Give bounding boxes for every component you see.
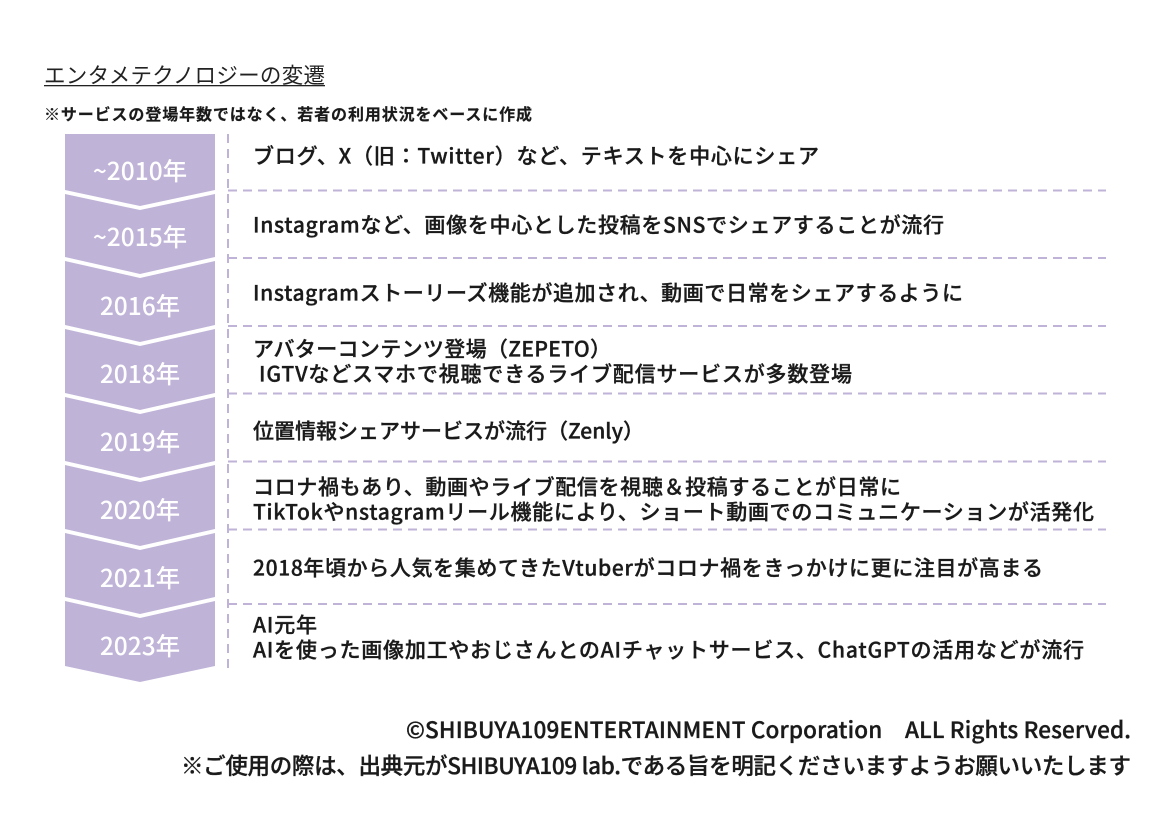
- timeline dividers: [228, 134, 1106, 672]
- year: 2021: [65, 533, 215, 614]
- row text: 2023: AIを使った画像加工やおじさんとのAIチャットサービス、ChatGPTの活用などが流行: [253, 635, 1084, 665]
- year: ~2015: [65, 194, 215, 274]
- year: 2016: [65, 261, 215, 342]
- row text: 2023: AI元年: [253, 610, 317, 640]
- row text: 2016: Instagramストーリーズ機能が追加され、動画で日常をシェアするように: [253, 278, 963, 308]
- row text: 2018: [253, 334, 852, 389]
- year: 2019: [65, 397, 215, 478]
- row text: 2019: 位置情報シェアサービスが流行（Zenly）: [253, 416, 644, 446]
- year: 2020: 2020年: [100, 492, 180, 527]
- year: 2023: 2023年: [100, 628, 180, 663]
- row text: 2021: 2018年頃から人気を集めてきたVtuberがコロナ禍をきっかけに更に注目が高まる: [253, 553, 1043, 583]
- year: 2018: 2018年: [100, 356, 180, 391]
- year: 2020: [65, 465, 215, 546]
- row text: 2020: TikTokやnstagramリール機能により、ショート動画でのコミュニケーションが活発化: [253, 497, 1094, 527]
- title: エンタメテクノロジーの変遷: [44, 59, 325, 90]
- row text: 2018: IGTVなどスマホで視聴できるライブ配信サービスが多数登場: [259, 359, 852, 389]
- note: ※サービスの登場年数ではなく、若者の利用状況をベースに作成: [44, 101, 532, 125]
- year: ~2010: [65, 134, 215, 206]
- year: 2023: [65, 601, 215, 682]
- year: 2019: 2019年: [100, 424, 180, 459]
- row text: 2020: コロナ禍もあり、動画やライブ配信を視聴＆投稿することが日常に: [253, 472, 901, 502]
- chevron column: [65, 134, 215, 682]
- row text: ~2010: ブログ、X（旧：Twitter）など、テキストを中心にシェア: [253, 141, 819, 171]
- row text: 2018: アバターコンテンツ登場（ZEPETO）: [253, 334, 611, 364]
- row text: 2020: [253, 472, 1094, 527]
- row text: 2023: [253, 610, 1084, 665]
- row text: ~2015: Instagramなど、画像を中心とした投稿をSNSでシェアすることが流行: [253, 210, 944, 240]
- year: ~2015: ~2015年: [93, 219, 187, 254]
- usage note: ※ご使用の際は、出典元がSHIBUYA109 lab.である旨を明記くださいますようお願いいたします: [181, 749, 1131, 781]
- year: ~2010: ~2010年: [93, 153, 187, 188]
- copyright: ©SHIBUYA109ENTERTAINMENT Corporation ALL Rights Reserved.: [406, 713, 1131, 745]
- year: 2021: 2021年: [100, 560, 180, 595]
- year: 2016: 2016年: [100, 288, 180, 323]
- year: 2018: [65, 329, 215, 410]
